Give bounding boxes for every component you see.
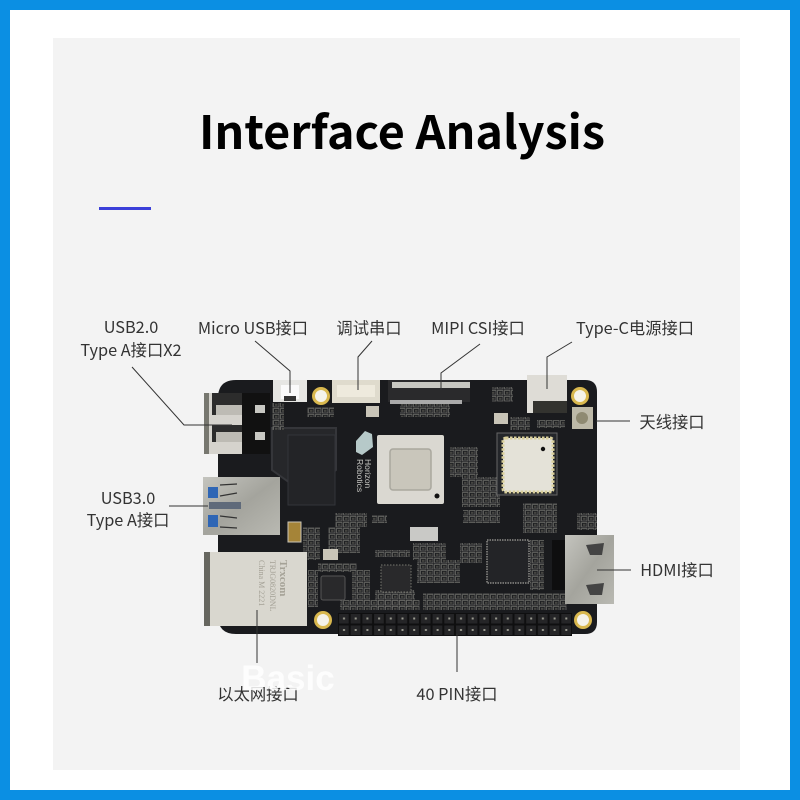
micro usb port bbox=[273, 380, 307, 402]
thermal pad blob bbox=[356, 431, 373, 455]
type-c port bbox=[527, 375, 567, 413]
mid chip bbox=[321, 576, 345, 600]
ethernet port bbox=[204, 552, 307, 626]
labels bbox=[80, 314, 714, 705]
board illustration bbox=[203, 375, 614, 636]
mounting holes bbox=[314, 388, 590, 628]
label: usb 3.0 second line: Type A接口 bbox=[87, 507, 169, 531]
soc chip bbox=[377, 435, 444, 504]
label: usb 2.0: USB2.0 bbox=[104, 314, 158, 338]
label: ethernet: 以太网接口 bbox=[217, 681, 299, 705]
label: 40 pin: 40 PIN接口 bbox=[416, 681, 498, 705]
shield watermark bbox=[272, 428, 336, 493]
label: usb 2.0 second line: Type A接口X2 bbox=[80, 337, 182, 361]
accent line bbox=[99, 207, 151, 210]
smd component clusters bbox=[272, 387, 597, 610]
label: type-c power: Type-C电源接口 bbox=[576, 315, 694, 339]
leader lines bbox=[132, 341, 631, 672]
pcb bbox=[218, 380, 597, 634]
ethernet port: Trxcom bbox=[277, 560, 289, 596]
antenna connector bbox=[572, 407, 593, 429]
ethernet port: TRJG0820DNL bbox=[268, 560, 277, 612]
ethernet port: China M 2221 bbox=[257, 560, 266, 606]
logo text: Horizon bbox=[363, 459, 373, 489]
usb 2.0 port bbox=[204, 393, 270, 454]
usb 3.0 port bbox=[203, 477, 280, 535]
watermark text: Basic bbox=[241, 659, 335, 698]
label: antenna: 天线接口 bbox=[639, 409, 705, 433]
40 pin header bbox=[338, 613, 572, 636]
debug serial connector bbox=[332, 380, 380, 403]
small silver parts bbox=[410, 527, 438, 541]
label: usb 3.0: USB3.0 bbox=[101, 485, 155, 509]
label: mipi csi: MIPI CSI接口 bbox=[431, 315, 525, 339]
legged chip bbox=[381, 565, 411, 592]
label: debug serial: 调试串口 bbox=[336, 315, 402, 339]
panel: content background bbox=[53, 38, 740, 770]
hdmi port bbox=[552, 535, 614, 604]
mipi csi connector bbox=[388, 380, 470, 404]
wifi module bbox=[497, 433, 557, 495]
label: micro usb: Micro USB接口 bbox=[198, 315, 308, 339]
label: hdmi: HDMI接口 bbox=[640, 557, 714, 581]
title: Interface Analysis bbox=[199, 97, 605, 163]
board illustration: Robotics bbox=[355, 459, 365, 492]
processor chip lower bbox=[487, 540, 529, 583]
memory chip bbox=[288, 435, 335, 505]
